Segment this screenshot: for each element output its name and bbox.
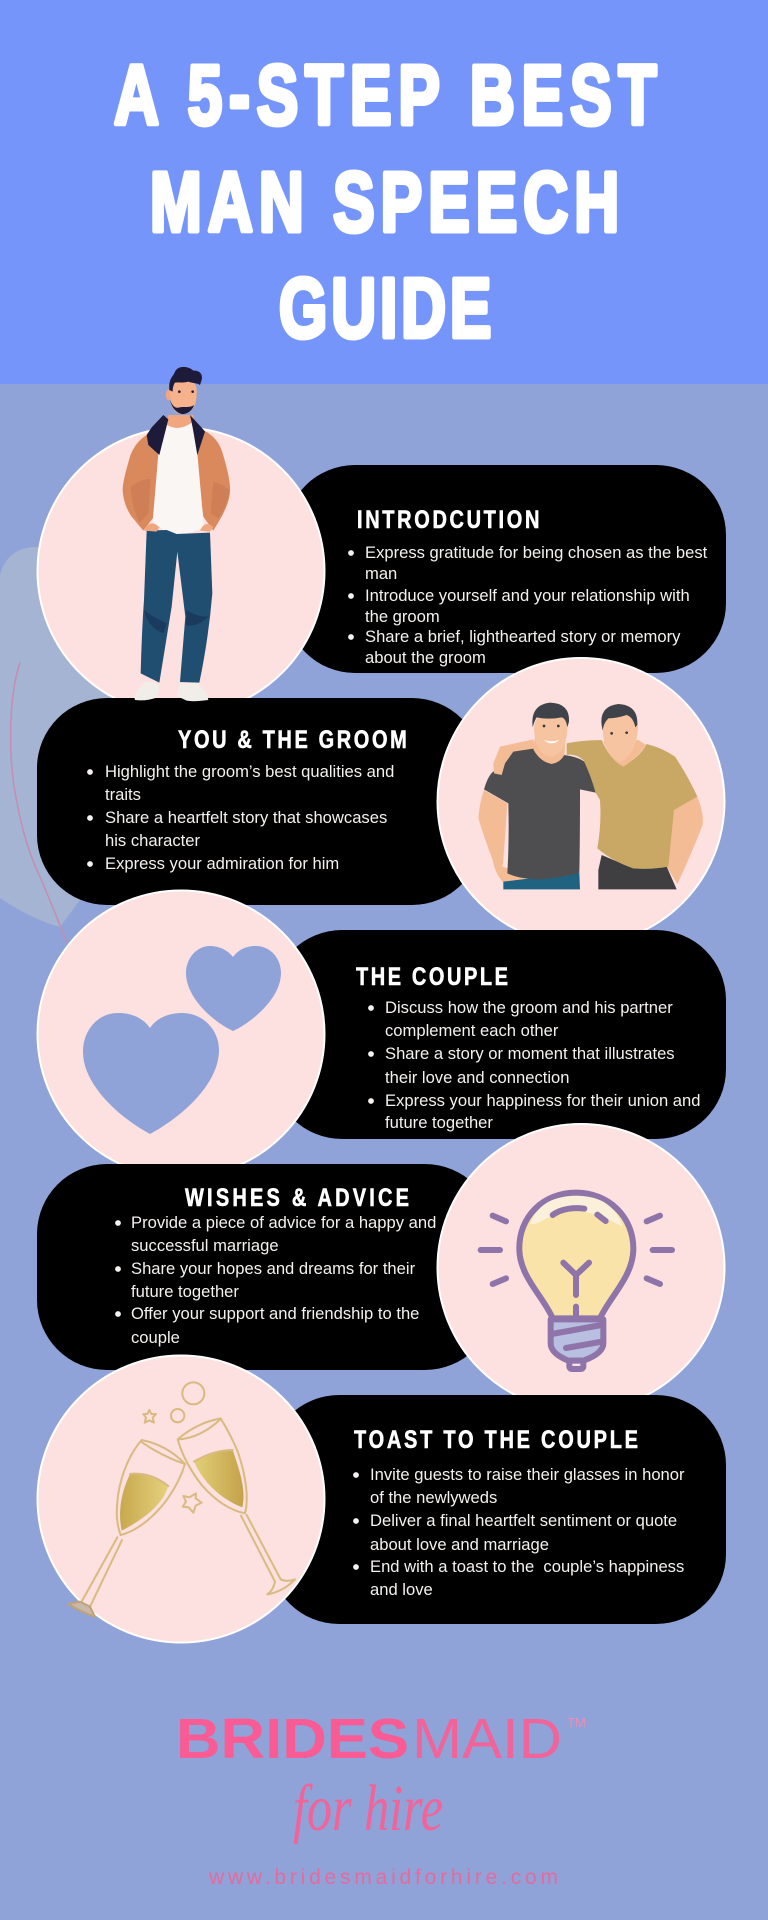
list: introduction (348, 543, 708, 667)
list: the couple: their love and connection (385, 1068, 570, 1087)
list: you and the groom: Share a heartfelt story that showcases (105, 808, 387, 827)
list: the couple: Share a story or moment that illustrates (385, 1044, 675, 1063)
list: introduction: about the groom (365, 648, 486, 667)
logo: bridesmaid for hire: MAID (412, 1707, 562, 1771)
title (114, 48, 656, 355)
list: introduction: the groom (365, 607, 440, 626)
title: MAN SPEECH (150, 155, 619, 249)
list: the couple: future together (385, 1113, 493, 1132)
list: wishes and advice: Offer your support and friendship to the (131, 1304, 419, 1323)
panel: you and the groom (37, 698, 482, 905)
title: GUIDE (279, 261, 491, 355)
list: you and the groom: Express your admiration for him (105, 854, 339, 873)
list: wishes and advice: Share your hopes and dreams for their (131, 1259, 416, 1278)
logo: bridesmaid for hire: for hire (293, 1772, 443, 1845)
list: toast to the couple: of the newlyweds (370, 1488, 497, 1507)
list: toast to the couple: and love (370, 1580, 433, 1599)
illustration: standing man (123, 367, 230, 701)
list: you and the groom (87, 762, 394, 873)
panel: wishes and advice (37, 1164, 495, 1370)
list: you and the groom: his character (105, 831, 200, 850)
circle: step 5 (38, 1356, 324, 1642)
icon: light bulb (481, 1193, 672, 1369)
list: toast to the couple: about love and marriage (370, 1535, 549, 1554)
logo: bridesmaid for hire (176, 1707, 586, 1845)
website url: www.bridesmaidforhire.com (208, 1866, 558, 1889)
list: introduction: Share a brief, lighthearted story or memory (365, 627, 681, 646)
logo: bridesmaid for hire: BRIDES (176, 1707, 409, 1771)
list: the couple: Discuss how the groom and his partner (385, 998, 673, 1017)
panel: toast to the couple (269, 1395, 726, 1624)
list: introduction: Express gratitude for being chosen as the best (365, 543, 708, 562)
circle: step 1 (38, 428, 324, 714)
circle: step 3 (38, 890, 324, 1178)
list: toast to the couple: End with a toast to the couple’s happiness (370, 1557, 684, 1576)
list: wishes and advice (115, 1213, 436, 1347)
list: you and the groom: Highlight the groom’s best qualities and (105, 762, 394, 781)
illustration: two friends (478, 703, 703, 889)
list: introduction: man (365, 564, 397, 583)
list: toast to the couple: Deliver a final heartfelt sentiment or quote (370, 1511, 677, 1530)
list: toast to the couple: Invite guests to raise their glasses in honor (370, 1465, 685, 1484)
heading: you and the groom: YOU & THE GROOM (178, 726, 407, 754)
logo: bridesmaid for hire: TM (567, 1715, 586, 1730)
background blob (0, 547, 120, 927)
circle: step 2 (438, 658, 724, 945)
circle: step 4 (438, 1124, 724, 1411)
heading: introduction: INTRODCUTION (357, 506, 539, 534)
icon: two hearts (83, 946, 281, 1134)
list: wishes and advice: successful marriage (131, 1236, 279, 1255)
heading: wishes and advice: WISHES & ADVICE (185, 1184, 409, 1212)
list: toast to the couple (353, 1465, 685, 1599)
list: the couple: Express your happiness for their union and (385, 1091, 700, 1110)
panel: the couple (272, 930, 726, 1139)
panel: introduction (285, 465, 726, 673)
header band (0, 0, 768, 384)
list: introduction: Introduce yourself and your relationship with (365, 586, 690, 605)
heading: toast to the couple: TOAST TO THE COUPLE (354, 1426, 638, 1454)
icon: champagne glasses (68, 1382, 295, 1617)
list: the couple: complement each other (385, 1021, 559, 1040)
list: wishes and advice: couple (131, 1328, 180, 1347)
list: wishes and advice: future together (131, 1282, 239, 1301)
heading: the couple: THE COUPLE (356, 963, 508, 991)
list: you and the groom: traits (105, 785, 141, 804)
list: wishes and advice: Provide a piece of advice for a happy and (131, 1213, 436, 1232)
decorative pink line (11, 662, 67, 943)
title: A 5-STEP BEST (114, 48, 656, 142)
list: the couple (368, 998, 700, 1132)
